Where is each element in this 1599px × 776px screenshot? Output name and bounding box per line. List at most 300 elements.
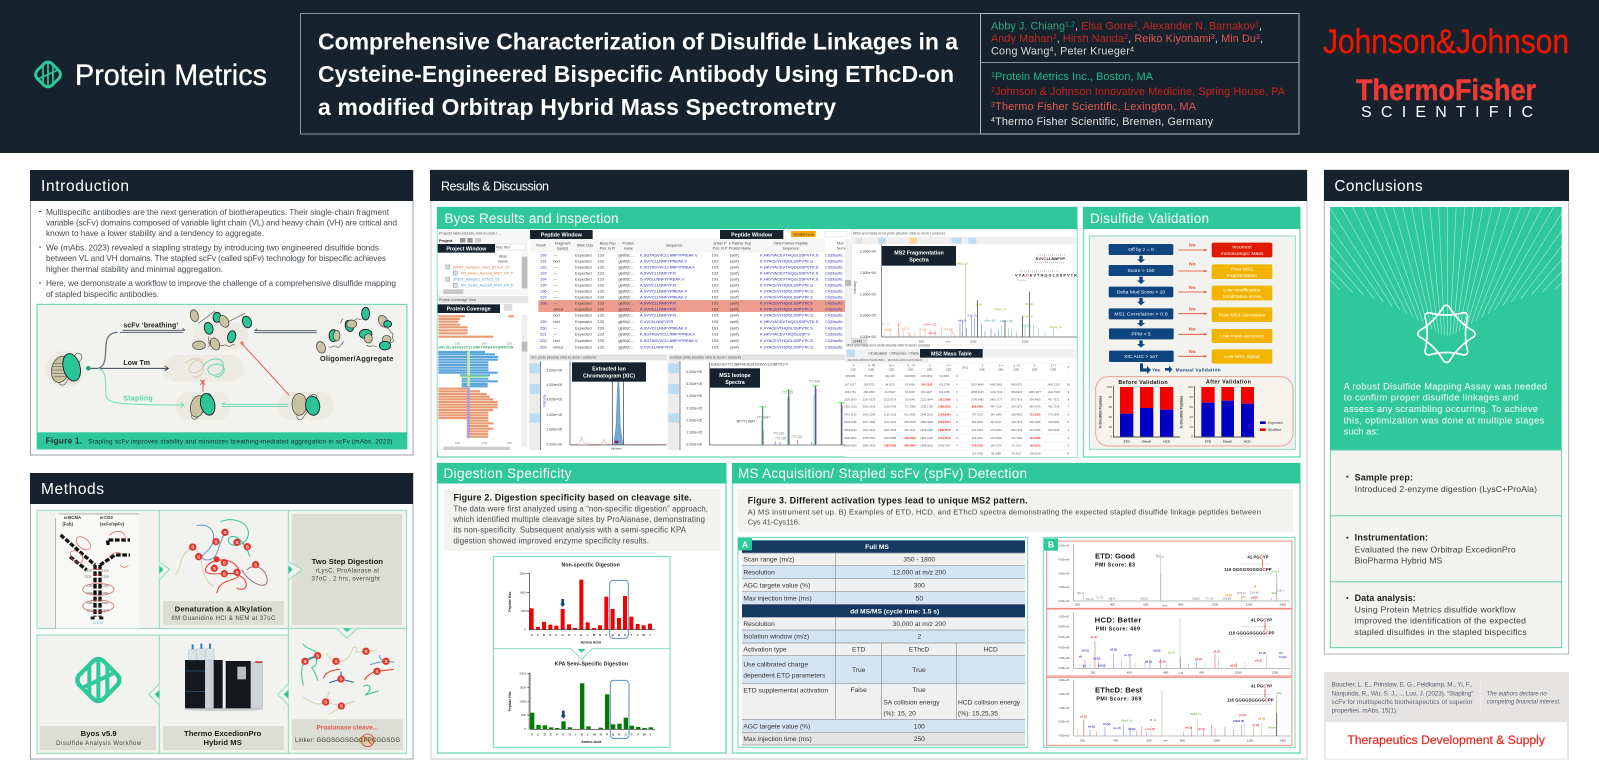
EThcD spectrum: y4 (2)	[1080, 714, 1087, 718]
peptide table: 133	[597, 338, 605, 343]
icon: scFv molecule	[49, 352, 83, 387]
chart: after validation: HCD	[1244, 439, 1251, 443]
conclusion lead text: assess any scrambling occurring. To achieve	[1344, 404, 1538, 414]
MS2 mass table: 100.0519	[1029, 451, 1041, 455]
MS2 mass table: 2986.4801	[920, 444, 933, 448]
peptide table: hcd	[553, 259, 560, 264]
MS2 mass table	[844, 344, 1077, 457]
table A: MS settings: Isolation window (m/z)	[743, 634, 809, 641]
label: Protein Coverage: Protein Coverage	[447, 307, 491, 313]
section: Byos Results and Inspection	[437, 207, 1077, 457]
project window: Name	[498, 259, 508, 263]
MS2 mass table: 204.1343	[921, 382, 933, 386]
ETD spectrum: c8	[1253, 584, 1257, 588]
MS2 mass table: 426.2023	[972, 436, 983, 440]
EThcD spectrum: 1400	[1279, 738, 1286, 742]
ETD spectrum: y8 (2)	[1225, 593, 1232, 597]
validation flow and charts	[1089, 236, 1295, 449]
peptide table: (self)	[730, 282, 740, 287]
introduction bullets: variable (scFv) domains composed of variable light chain (VL) and heavy chain (VH) are critical and	[46, 218, 397, 228]
peptide table: 133	[597, 259, 605, 264]
text: Proalanase cleave: Proalanase cleave...	[316, 724, 378, 731]
EThcD spectrum: EThcD: Best	[1095, 686, 1143, 695]
MS2 mass table: b	[853, 364, 855, 368]
MS2 mass table: 1111.5508	[938, 397, 951, 401]
chart: KPA semi-specific digestion: 1500	[519, 685, 526, 689]
peptide table: 190	[540, 253, 547, 258]
breathing domains	[189, 309, 253, 352]
EThcD spectrum: y+4+ (2)	[1145, 727, 1155, 731]
authors and affiliations box: 3	[1211, 34, 1215, 41]
peptide table: gi|80|C...	[618, 253, 634, 258]
yes to manual validation: Manual Validation	[1176, 367, 1221, 372]
chart: non-specific digestion: Amino Acid	[581, 640, 601, 644]
MS2 mass table: 865.593	[846, 374, 856, 378]
item: instrumentation: Instrumentation:	[1355, 533, 1428, 543]
peptide table: (self)	[730, 344, 740, 349]
table A: MS settings: 2	[917, 634, 921, 641]
heading: Disulfide Validation: Disulfide Validation	[1090, 211, 1209, 226]
MS2 mass table: 1330.1646	[884, 428, 897, 432]
peptide table: ethcd	[553, 344, 563, 349]
MS2 mass table: calc.	[889, 367, 895, 371]
link column: C3(Disulfic	[825, 332, 843, 336]
chart: after validation: 60	[1190, 405, 1193, 409]
MS2 mass table: 1168.0929	[938, 405, 951, 409]
label: Extracted Ion Chromatogram: Extracted Ion	[592, 367, 626, 373]
peptide table: (self)	[730, 271, 740, 276]
peptide table: A.SVVCLLNNFYPREAK.V	[640, 325, 688, 330]
chart: before validation: Before Validation	[1118, 380, 1168, 386]
MS2 mass table: 1103.0376	[884, 397, 897, 401]
figure 1: stapling scheme	[37, 304, 407, 449]
chart: non-specific digestion: Y	[649, 633, 651, 637]
authors and affiliations box: ,	[1259, 20, 1262, 32]
open scFv	[292, 393, 321, 421]
MS2 mass table: V	[956, 382, 958, 386]
MS2 mass table: C	[956, 397, 958, 401]
peptide table: K.HKVYACEVTHQGLSSPVTK.S	[760, 277, 819, 282]
XIC plot: Minutes	[611, 446, 622, 450]
isotope plot: Extract mz=772.3884,44,45,28.00,SVVCLLNNFYP,z=4	[711, 363, 788, 367]
item: instrumentation	[1346, 533, 1516, 566]
antibody diagram: α-CD3	[100, 515, 113, 520]
MS2 mass table: calc.	[946, 367, 952, 371]
authors and affiliations box: Cong Wang	[991, 45, 1049, 57]
heading: Byos Results and Inspection: Byos Results and Inspection	[444, 211, 618, 226]
isotope plot: 5.000e+05	[686, 382, 702, 386]
MS2 mass table: 213.6048	[990, 436, 1002, 440]
protein coverage view: 140	[482, 341, 487, 345]
project window: Alias	[499, 254, 507, 258]
MS2 mass table: 2205.0879	[844, 397, 857, 401]
unfolded tangle	[185, 359, 224, 377]
HCD spectrum: b8 (2)	[1093, 656, 1101, 660]
protein coverage view: 150	[507, 341, 512, 345]
MS2 mass table: 1459.2461	[990, 382, 1003, 386]
criteria boxes: Delta Mod Score > 10	[1117, 290, 1165, 296]
HCD spectrum: 200	[1090, 670, 1096, 674]
label: MS1 Isotope Spectra: Spectra	[725, 380, 745, 386]
text: Proalanase cleave: Linker: GGGSGGSGGCPPCGGSGG	[295, 738, 400, 744]
table A: MS settings: Scan range (m/z)	[743, 557, 794, 564]
tangled protein chains with disulfides: S	[223, 571, 226, 576]
MS2 mass table: 94.0575	[885, 382, 895, 386]
peptide table: Expected	[575, 319, 592, 324]
heading: Introduction: Introduction	[41, 178, 129, 195]
ETD spectrum: 4.000e+04	[1058, 574, 1070, 576]
ETD spectrum: 6.000e+04	[1058, 560, 1070, 562]
MS2 mass table: 2187.0573	[863, 397, 876, 401]
criteria boxes: Score > 150	[1127, 268, 1155, 274]
MS2 mass table: 256.4623	[1011, 413, 1023, 417]
MS2 mass table: N	[956, 428, 958, 432]
peptide table: Expected	[575, 300, 592, 305]
link column: C4(Disulfic	[825, 272, 843, 276]
ETD spectrum: ETD: Good	[1095, 552, 1135, 561]
tangled protein chains with disulfides: S	[223, 560, 226, 565]
No arrows: No	[1189, 242, 1196, 248]
MS2 mass table: calc.	[1013, 367, 1020, 371]
project window: Project	[439, 238, 453, 243]
MS2 mass table: 1281.6564	[938, 420, 951, 424]
peptide table: 193	[712, 282, 719, 287]
MS2 mass table: 7	[1068, 405, 1070, 409]
peptide table: gi|80|C...	[618, 294, 634, 299]
antibody diagram: C261	[102, 584, 109, 588]
peptide table: Expected	[575, 253, 592, 258]
peptide table: (self)	[730, 265, 740, 270]
authors and affiliations box: Min Du	[1221, 33, 1256, 45]
software screenshot right	[825, 229, 1077, 457]
chart legend: Expected	[1268, 421, 1283, 425]
badge A	[738, 538, 752, 550]
peptide table: 133	[597, 344, 605, 349]
HCD spectrum: 800	[1199, 670, 1205, 674]
EThcD spectrum: 1.500e+05	[1058, 694, 1070, 696]
peptide table: 191	[540, 259, 547, 264]
peptide table: K.HKVYACEVTHQGLSSP.V	[760, 331, 810, 336]
MS2 mass table: 735.6941	[904, 397, 916, 401]
table A: MS settings: HCD	[983, 647, 998, 654]
chart: KPA semi-specific digestion: T	[631, 733, 633, 737]
section: MS Acquisition / Stapled scFv detection	[732, 463, 1300, 753]
failure boxes: Incorrect	[1232, 245, 1252, 251]
EThcD spectrum: Pep2_1+	[1190, 712, 1202, 716]
peptide table: A.SVVCLLNNFYP.R	[640, 282, 676, 287]
peptide table: Pos. in P	[713, 246, 728, 250]
authors and affiliations box: , Peter Krueger	[1054, 45, 1130, 57]
failure boxes: Poor MS2	[1231, 266, 1253, 272]
chart: before validation: 20	[1109, 425, 1112, 429]
ETD spectrum: 571.18	[1156, 555, 1165, 558]
EThcD spectrum: b+ (2)	[1114, 726, 1121, 730]
peptide table: —	[553, 282, 557, 287]
authors and affiliations box: 1,2	[1065, 22, 1075, 28]
chart: after validation: 40	[1190, 415, 1193, 419]
chart: non-specific digestion: H	[568, 633, 570, 637]
text: Thermo ExcedionPro Hybrid MS: Hybrid MS	[203, 738, 242, 747]
peptide table: 199	[540, 319, 547, 324]
criteria boxes	[1109, 244, 1174, 362]
peptide table: gi|80|C...	[618, 312, 634, 317]
chart: KPA semi-specific digestion: H	[569, 733, 571, 737]
MS2 mass table: 93.7162	[1012, 444, 1022, 448]
peptide table: 196	[540, 288, 547, 293]
MS2 mass table: 2431.2160	[844, 413, 857, 417]
peptide table: 193	[712, 265, 719, 270]
authors and affiliations box: ,	[1215, 33, 1221, 45]
pathway arrows	[88, 328, 317, 407]
MS2 mass table: Seq.	[962, 365, 969, 369]
peptide table: 195	[540, 282, 547, 287]
authors and affiliations box: Thermo Fisher Scientific, Bremen, Germany	[995, 116, 1214, 128]
peptide table: K.VYACEVTHQGLSSPVTK.S	[760, 259, 813, 264]
MS2 mass table: 1338.6778	[938, 428, 951, 432]
authors and affiliations box: ,	[1128, 33, 1134, 45]
EThcD spectrum: b6 (2)	[1103, 722, 1111, 726]
table A: MS settings: 12,000 at m/z 200	[893, 570, 946, 577]
antibody diagram: C261	[87, 584, 94, 588]
isotope plot: 4.000e+05	[686, 394, 702, 398]
ETD spectrum: Pep	[1272, 591, 1277, 595]
ETD spectrum: M	[1156, 555, 1158, 558]
MS2 mass table: V	[956, 390, 958, 394]
chart: KPA semi-specific digestion: Peptide Hits	[508, 691, 512, 711]
table A: MS settings: Resolution	[743, 621, 775, 628]
chart: after validation: 100	[1188, 385, 1193, 389]
antibody diagram: C425	[102, 609, 109, 613]
MS2 mass table: 10	[1067, 382, 1070, 386]
EThcD spectrum: 600	[1147, 738, 1152, 742]
authors and affiliations box: Abby J. Chiang	[991, 20, 1065, 32]
peptide table: K.HKVYACEVTHQGLSSPVTK.S	[760, 271, 819, 276]
failure boxes	[1212, 243, 1272, 364]
label: scFv breathing: scFv ‘breathing’	[123, 323, 178, 330]
label: Project Window	[438, 244, 495, 253]
reference citation: Nanjunda, R., Wu, S. J., ... Luo, J. (2023). “Stapling”	[1332, 690, 1473, 697]
peptide table: K.VYACEVTHQGLSSPVTK.S	[760, 300, 813, 305]
XIC plot: 0.000e+00	[546, 442, 562, 446]
heading: MS Acquisition: MS Acquisition/ Stapled scFv (spFv) Detection	[738, 466, 1027, 481]
MS2 mass table: 2413.2254	[863, 413, 876, 417]
ETD spectrum: 0.000e+00	[1058, 601, 1070, 603]
XIC plot: Intensity	[542, 394, 546, 407]
HCD spectrum: 2.000e+06	[1058, 658, 1070, 660]
peptide table: —	[553, 265, 557, 270]
MS2 mass table: 169.0972	[863, 382, 875, 386]
EThcD spectrum: y8 (2)	[1198, 727, 1205, 731]
tangled protein chains with disulfides: S	[197, 554, 200, 559]
table A: MS settings: Resolution	[743, 570, 775, 577]
tangled protein chains with disulfides: S	[191, 545, 194, 550]
item: data analysis: improved the identification of the expected	[1355, 616, 1526, 626]
table A: MS settings: AGC targete value (%)	[743, 723, 810, 730]
table A: MS settings: 300	[914, 582, 925, 589]
peptide table: 201	[540, 331, 547, 336]
MS2 mass table: 2641.3113	[863, 428, 876, 432]
ETD spectrum: 1225.43	[1237, 592, 1246, 595]
chart: before validation: HCD	[1163, 439, 1171, 443]
EThcD spectrum: y4 (2)	[1239, 713, 1246, 717]
chart: after validation: After Validation	[1206, 380, 1251, 386]
authors and affiliations box	[980, 14, 1299, 134]
ETD spectrum: 971.40	[1206, 597, 1214, 600]
MS2 mass table: calc.	[998, 367, 1005, 371]
MS2 spectrum plot: Pep2_2+	[957, 262, 969, 266]
label: Extracted Ion Chromatogram: Chromatogram (XIC)	[583, 374, 635, 380]
chart: KPA semi-specific digestion: E	[550, 733, 552, 737]
peptide table: A.SVVCLLNNFYP.R	[640, 271, 676, 276]
chart legend	[1260, 421, 1283, 432]
MS2 spectrum plot: 1000	[970, 340, 977, 344]
No arrows: No	[1189, 326, 1196, 332]
HCD spectrum: y4 (2)	[1090, 635, 1097, 639]
chart: KPA semi-specific digestion: F	[556, 733, 558, 737]
EThcD spectrum: PMI Score: 369	[1096, 696, 1141, 702]
chart: non-specific digestion: W	[642, 633, 645, 637]
chart: KPA semi-specific digestion: Amino Acid	[581, 740, 601, 744]
chart: non-specific digestion: Non-specific Digestion	[561, 562, 620, 568]
text: Two Step Digestion: 37oC , 2 hrs, overnight	[311, 577, 380, 583]
MS2 mass table: 96.0636	[905, 390, 915, 394]
MS2 mass table: 268.1656	[863, 390, 875, 394]
protein coverage view: GRLIGLGTASVVCLLNNFYPREAKVQWKVDN	[438, 345, 514, 349]
MS2 mass table: 524.2266	[1029, 428, 1041, 432]
EThcD spectrum: 1000	[1213, 738, 1220, 742]
MS2 mass table: 1159.5796	[884, 405, 897, 409]
table A: MS settings: 100	[914, 723, 925, 730]
divider chevron	[493, 649, 670, 659]
label: MS1 Isotope Spectra	[710, 368, 760, 388]
chart: before validation: 100	[1107, 385, 1112, 389]
chart: KPA semi-specific digestion: I	[575, 733, 576, 737]
peptide table: hcd	[553, 312, 560, 317]
reference citation: Boucher, L. E., Prinslow, E. G., Feldkamp, M., Yi, F.,	[1332, 682, 1473, 689]
HCD spectrum: y4 (2)	[1213, 650, 1220, 654]
MS2 mass table: 70.0287	[864, 374, 874, 378]
digested peptides: S	[375, 669, 379, 674]
MS2 mass table: 143.5917	[884, 390, 896, 394]
peptide table	[530, 240, 825, 350]
chart: before validation: 40	[1109, 415, 1112, 419]
MS2 spectrum plot: MS2 and mass error plots (double click to dock / undock)	[853, 231, 945, 235]
EThcD spectrum: 2.000e+05	[1058, 680, 1070, 682]
MS2 spectrum plot: m/z	[946, 340, 951, 344]
label: Low Tm: Low Tm	[123, 360, 150, 367]
No arrows: No	[1189, 261, 1196, 267]
chart: after validation	[1180, 380, 1255, 443]
conclusion lead text: such as:	[1344, 427, 1379, 437]
MS2 mass table: 187.1017	[845, 382, 856, 386]
MS2 mass table: 410.1836	[1029, 436, 1041, 440]
MS2 mass table: 142.7390	[1011, 436, 1023, 440]
logo: Johnson & Johnson: Johnson&Johnson	[1323, 23, 1569, 61]
EThcD spectrum: 1200	[1247, 738, 1254, 742]
chart: before validation: 0	[1110, 435, 1112, 439]
antibody diagram: C321	[102, 591, 109, 595]
antibody diagram: (Fab)	[62, 522, 73, 527]
EThcD spectrum: 41 PGCYP	[1251, 684, 1272, 689]
chart: KPA semi-specific digestion: 500	[521, 713, 526, 717]
peptide table: Expected	[575, 288, 592, 293]
chart: before validation: 80	[1109, 395, 1112, 399]
EThcD spectrum: 116 GGGGSGGGGCPP	[1227, 697, 1274, 702]
ETD spectrum: 8.000e+04	[1058, 546, 1070, 548]
conclusion lead text	[1344, 381, 1547, 437]
MS2 mass table: 2222.0944	[920, 397, 933, 401]
peptide table: K.VYACEVTHQGLSSPVTK.S	[760, 294, 813, 299]
ETD spectrum: 1246.48	[1250, 591, 1259, 594]
label: MS1 Isotope Spectra: MS1 Isotope	[719, 373, 751, 379]
isotope plot: 1.000e+05	[686, 430, 702, 434]
peptide table: K.SGTASVVCLLNNFYPREAK.V	[640, 338, 698, 343]
badge B	[1044, 538, 1058, 551]
MS2 spectrum plot: z8++ (2)	[984, 318, 995, 322]
MS2 mass table: 1216.1216	[884, 413, 897, 417]
peptide table: 193	[712, 338, 719, 343]
chart: non-specific digestion: G	[562, 633, 565, 637]
ETD spectrum: 800	[1178, 602, 1184, 606]
authors and affiliations box: 2	[991, 87, 995, 94]
HCD spectrum: b8 (2)	[1098, 664, 1106, 668]
XIC plot: 4.000e+05	[546, 383, 562, 387]
HCD spectrum	[1047, 609, 1292, 676]
link column: C4(Disulfic	[825, 313, 843, 317]
ETD spectrum: PMI Score: 83	[1095, 562, 1135, 568]
MS2 mass table: Y	[956, 444, 958, 448]
peptide table: 133	[597, 294, 605, 299]
tangled protein chains with disulfides: S	[254, 562, 257, 567]
ETD spectrum: 581.43	[1140, 597, 1149, 600]
chart: KPA semi-specific digestion: M	[593, 733, 596, 737]
MS2 mass table: z.++	[1051, 364, 1057, 368]
stapled molecule	[188, 392, 217, 420]
HCD spectrum: 8.000e+06	[1058, 627, 1070, 629]
panel: Results & Discussion	[430, 170, 1307, 759]
ETD spectrum: 1281.4	[1277, 590, 1285, 593]
table A: MS settings: ETD	[852, 647, 866, 654]
MS2 mass table: 279.1339	[972, 444, 983, 448]
chart: KPA semi-specific digestion: N	[600, 733, 602, 737]
aggregate domains	[315, 307, 394, 354]
project window: |INIST_Sample1_EThcD_02	[453, 278, 499, 282]
HCD spectrum: y8 (2)	[1159, 660, 1166, 664]
peptide table: type(s)	[557, 246, 568, 250]
HCD spectrum: b5 (2)	[1082, 648, 1089, 652]
peptide table: Fragment	[555, 241, 570, 245]
peptide table: Expected	[575, 331, 592, 336]
EThcD spectrum: y4 (2)	[1185, 725, 1192, 729]
ETD spectrum: 332.20	[1086, 598, 1094, 601]
ETD spectrum: 41 PGCYP	[1247, 554, 1269, 559]
MS2 mass table: 63.0408	[905, 382, 915, 386]
figure 1 caption: Figure 1. Stapling scFv improves stability and minimizes breathing-mediated aggregation in scFv (mAbs. 2023)	[46, 435, 392, 445]
reference citation: scFv for multispecific biotherapeutics of superior	[1332, 699, 1473, 706]
tangled protein chains with disulfides: S	[235, 570, 239, 575]
figure 2 description: The data were first analyzed using a “non-specific digestion” approach,	[453, 504, 708, 513]
authors and affiliations box: 2	[1255, 22, 1259, 28]
peptide table: Expected	[575, 282, 592, 287]
peptide table: —	[553, 325, 557, 330]
introduction bullets: Multispecific antibodies are the next generation of biotherapeutics. Their single-chain fragment	[46, 207, 390, 217]
HCD spectrum: b4 (2)	[1259, 651, 1266, 655]
XIC plot: XIC plots (double click to dock / undock)	[531, 356, 596, 360]
MS2 mass table: 319.6384	[1048, 420, 1060, 424]
peptide table: artner P	[713, 241, 727, 245]
criteria boxes: XIC AUC > 1e7	[1124, 354, 1158, 360]
chart: KPA semi-specific digestion: R	[618, 733, 621, 737]
